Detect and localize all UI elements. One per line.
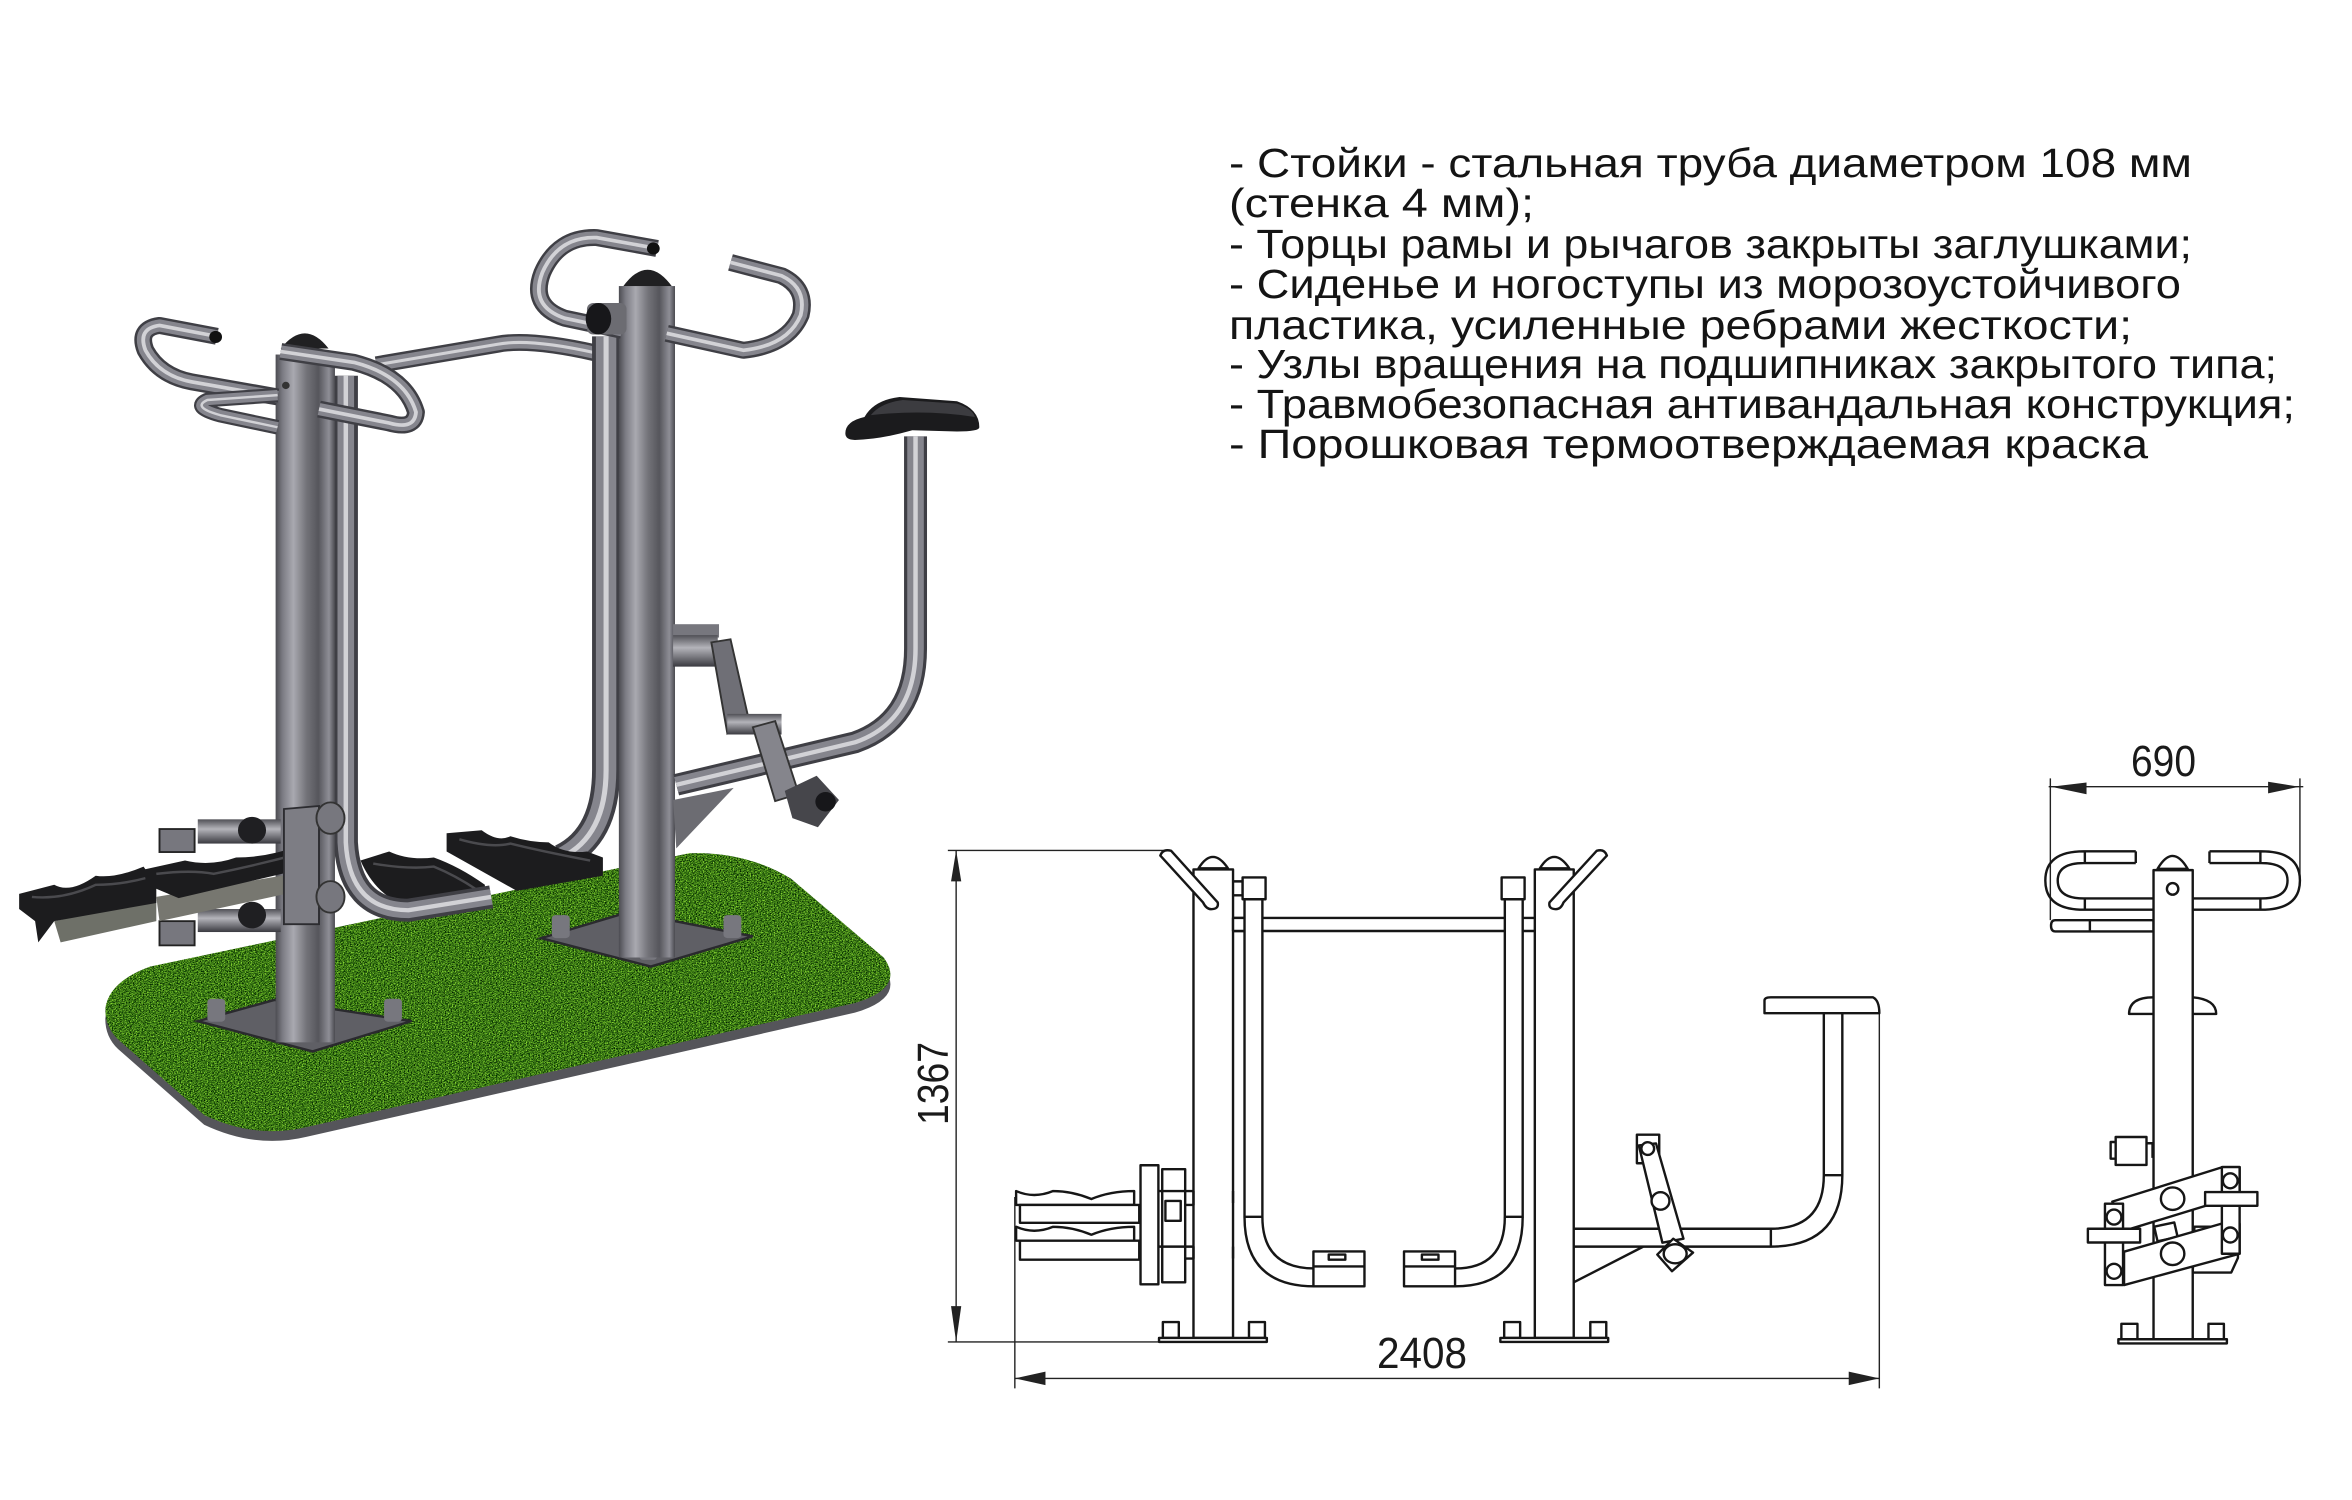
seat edges [2129, 997, 2216, 1014]
specification text block: - Стойки - стальная труба диаметром 108 мм [1229, 140, 2192, 186]
front pedal assembly [19, 802, 345, 945]
dimension label: width: 690 [2131, 737, 2196, 786]
crank [1637, 1135, 1693, 1271]
specification text block: - Узлы вращения на подшипниках закрытого типа; [1229, 341, 2277, 387]
grass base [96, 842, 906, 1145]
rear arm and cross tube [376, 336, 606, 858]
specification text block: - Торцы рамы и рычагов закрыты заглушками; [1229, 221, 2192, 267]
front base plate [198, 999, 412, 1051]
crank plates [2088, 1167, 2257, 1285]
handlebars [2045, 851, 2300, 931]
rear handlebars [539, 238, 802, 350]
width dimension line [2049, 778, 2303, 920]
left post and base [1159, 850, 1267, 1342]
block [2111, 1137, 2153, 1165]
side elevation technical drawing [2045, 778, 2303, 1343]
base [2118, 1324, 2227, 1343]
dimension label: height: 1367 [909, 1042, 958, 1125]
post [2154, 856, 2193, 1341]
height and width dimension lines [948, 850, 1879, 1388]
specification text block: - Порошковая термоотверждаемая краска [1229, 421, 2148, 467]
right post and base [1500, 850, 1608, 1342]
rear post [619, 270, 675, 958]
specification text block: пластика, усиленные ребрами жесткости; [1229, 302, 2132, 348]
rear post base plate [541, 912, 753, 967]
front post [276, 333, 335, 1042]
seat with support [1574, 997, 1879, 1282]
front arm [346, 376, 491, 910]
3D render of exercise machine on grass [19, 238, 979, 1145]
seat [845, 397, 979, 440]
side pedals [1313, 1251, 1455, 1286]
dimension label: length: 2408 [1377, 1329, 1467, 1378]
specification text block: - Травмобезопасная антивандальная конструкция; [1229, 381, 2295, 427]
specification text block [1229, 140, 2295, 467]
specification text block: - Сиденье и ногоступы из морозоустойчивого [1229, 261, 2181, 307]
walking arms [1243, 877, 1525, 1286]
front elevation technical drawing [948, 850, 1879, 1388]
crank assembly [673, 436, 916, 848]
line drawing [2045, 851, 2300, 1343]
rear pedals [360, 830, 603, 906]
front handlebars [143, 325, 416, 427]
line drawing [1016, 850, 1879, 1342]
specification text block: (стенка 4 мм); [1229, 180, 1534, 226]
front pedals [1016, 1165, 1233, 1284]
crossbar [1233, 918, 1535, 931]
